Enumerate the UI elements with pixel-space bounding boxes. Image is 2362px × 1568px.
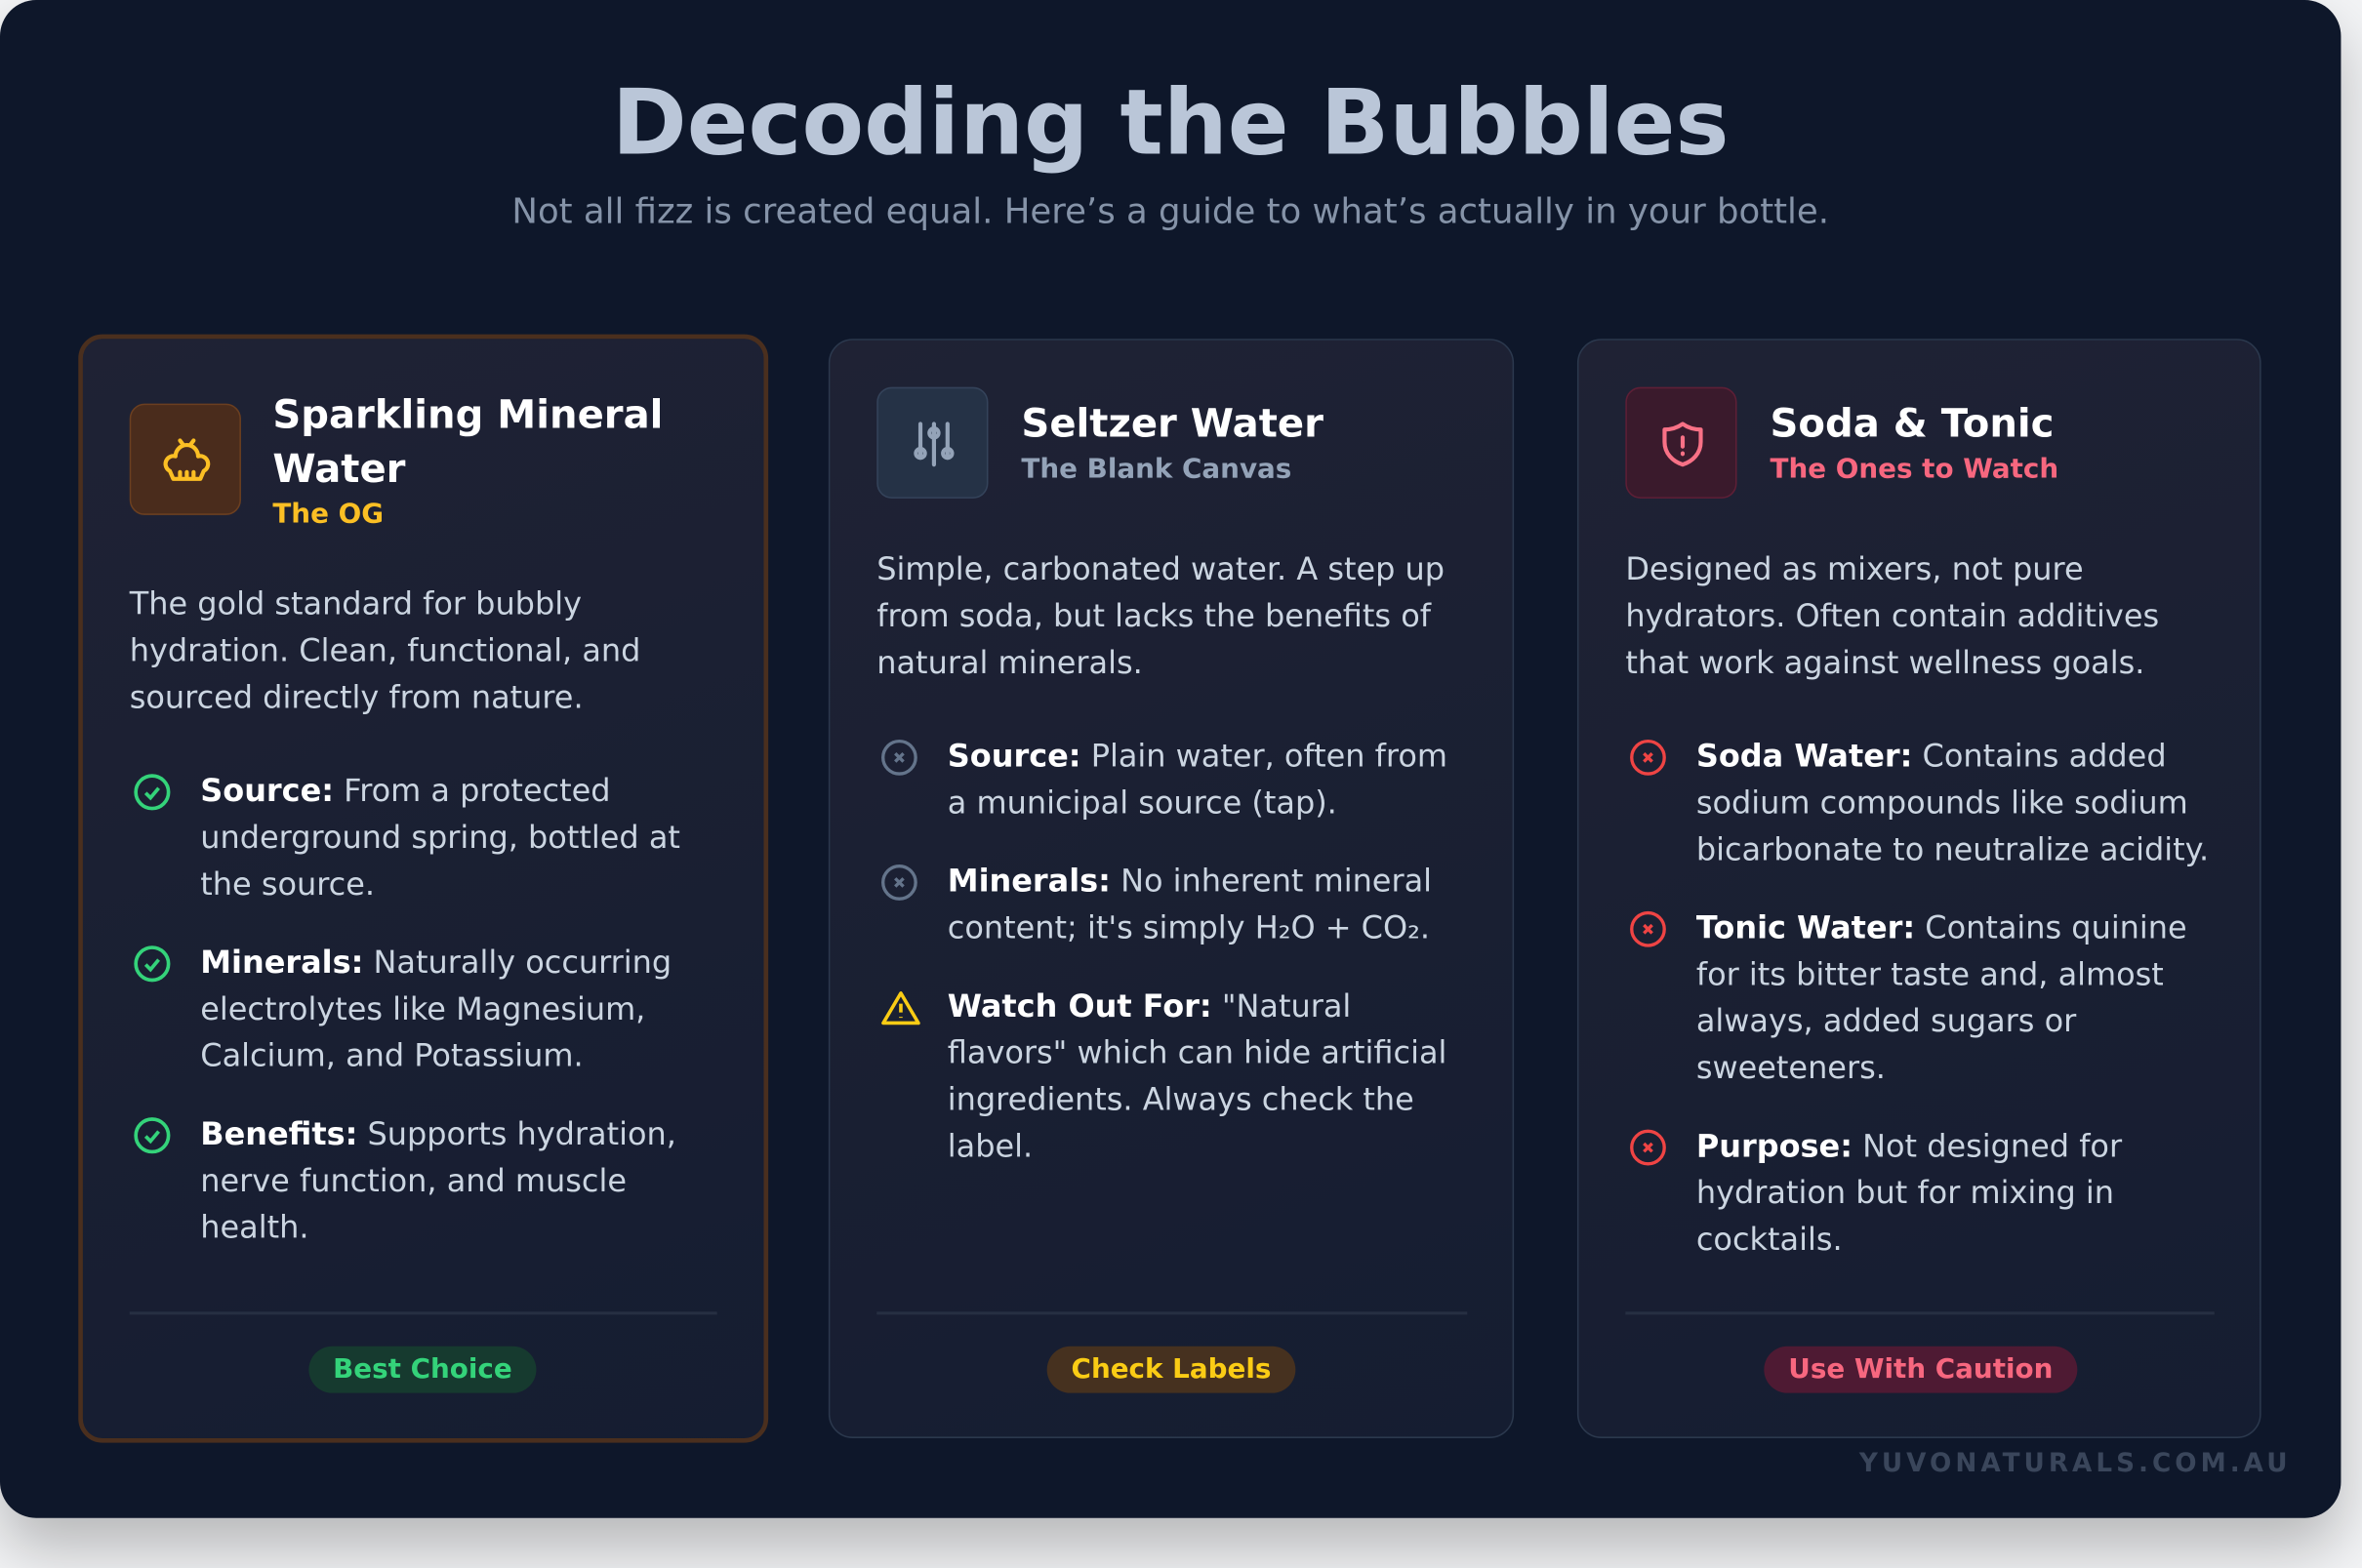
tagline: The OG bbox=[272, 499, 384, 530]
item: purpose bbox=[1630, 1128, 2122, 1258]
item: minerals: content; it's simply H₂O + CO₂. bbox=[948, 909, 1430, 945]
item: tonic water: sweeteners. bbox=[1696, 1050, 1886, 1086]
description bbox=[1625, 551, 2159, 681]
item: source: Source: Plain water, often from bbox=[948, 738, 1447, 774]
item: minerals bbox=[881, 863, 1432, 945]
item: source bbox=[881, 738, 1447, 821]
description: hydrators. Often contain additives bbox=[1625, 598, 2159, 634]
item: source bbox=[134, 773, 680, 902]
description: from soda, but lacks the benefits of bbox=[876, 598, 1431, 634]
description: Designed as mixers, not pure bbox=[1625, 551, 2084, 587]
item: benefits: health. bbox=[200, 1209, 309, 1245]
description: that work against wellness goals. bbox=[1625, 645, 2144, 681]
item: purpose: hydration but for mixing in bbox=[1696, 1175, 2114, 1211]
tagline: The Ones to Watch bbox=[1770, 454, 2058, 485]
description: natural minerals. bbox=[876, 645, 1143, 681]
item: watch out: ingredients. Always check the bbox=[948, 1081, 1414, 1117]
item: purpose: Purpose: Not designed for bbox=[1696, 1128, 2122, 1164]
item: watch out: Watch Out For: "Natural bbox=[948, 987, 1351, 1025]
heading: Water bbox=[272, 447, 405, 493]
description bbox=[876, 551, 1445, 681]
item: source: the source. bbox=[200, 865, 375, 902]
heading: Seltzer Water bbox=[1021, 402, 1324, 447]
icon: mineral bbox=[130, 404, 241, 515]
item: minerals: Minerals: No inherent mineral bbox=[948, 863, 1432, 899]
footer brand: YUVONATURALS.COM.AU bbox=[1859, 1449, 2292, 1479]
item: benefits: Benefits: Supports hydration, bbox=[200, 1116, 676, 1152]
item: soda water: Soda Water: Contains added bbox=[1696, 738, 2167, 774]
panel: sparkling mineral water bbox=[78, 335, 768, 1443]
item: tonic water bbox=[1630, 909, 2187, 1086]
badge: use with caution bbox=[1764, 1347, 2077, 1393]
heading bbox=[272, 393, 663, 493]
item: watch out: flavors" which can hide artificial bbox=[948, 1034, 1446, 1070]
title: Decoding the Bubbles bbox=[612, 71, 1730, 177]
heading: Soda & Tonic bbox=[1770, 402, 2054, 447]
badge: use with caution: Use With Caution bbox=[1788, 1354, 2053, 1386]
item: tonic water: always, added sugars or bbox=[1696, 1003, 2076, 1039]
item: soda water: bicarbonate to neutralize acidity. bbox=[1696, 831, 2209, 867]
badge: check labels bbox=[1047, 1347, 1295, 1393]
item: minerals: electrolytes like Magnesium, bbox=[200, 991, 645, 1027]
description: The gold standard for bubbly bbox=[130, 585, 582, 622]
item: soda water bbox=[1630, 738, 2209, 867]
item: minerals: Calcium, and Potassium. bbox=[200, 1037, 584, 1073]
badge: check labels: Check Labels bbox=[1072, 1354, 1271, 1386]
item: benefits: nerve function, and muscle bbox=[200, 1163, 627, 1199]
item: minerals: Minerals: Naturally occurring bbox=[200, 945, 672, 981]
description bbox=[129, 585, 640, 715]
item: source: underground spring, bottled at bbox=[200, 820, 680, 856]
item: watch out bbox=[881, 987, 1446, 1164]
item: benefits bbox=[134, 1116, 676, 1245]
item: tonic water: for its bitter taste and, almost bbox=[1696, 956, 2164, 992]
item: watch out: label. bbox=[948, 1128, 1033, 1164]
item: soda water: sodium compounds like sodium bbox=[1696, 784, 2188, 821]
item: source: a municipal source (tap). bbox=[948, 784, 1337, 821]
icon: sliders bbox=[876, 387, 988, 499]
description: Simple, carbonated water. A step up bbox=[876, 551, 1445, 587]
description: hydration. Clean, functional, and bbox=[130, 632, 640, 668]
item: purpose: cocktails. bbox=[1696, 1222, 1843, 1258]
tagline: The Blank Canvas bbox=[1021, 454, 1291, 485]
icon: shield bbox=[1625, 387, 1737, 499]
item: source: Source: From a protected bbox=[200, 773, 611, 809]
item: tonic water: Tonic Water: Contains quinine bbox=[1696, 909, 2187, 945]
badge: best choice bbox=[308, 1347, 536, 1393]
description: sourced directly from nature. bbox=[130, 679, 584, 715]
badge: best choice: Best Choice bbox=[333, 1354, 512, 1386]
subtitle: Not all fizz is created equal. Here’s a guide to what’s actually in your bottle. bbox=[511, 193, 1829, 232]
panel: soda & tonic bbox=[1577, 339, 2261, 1438]
item: minerals bbox=[134, 945, 672, 1073]
panel: seltzer water bbox=[829, 339, 1514, 1438]
heading: Sparkling Mineral bbox=[272, 393, 663, 438]
